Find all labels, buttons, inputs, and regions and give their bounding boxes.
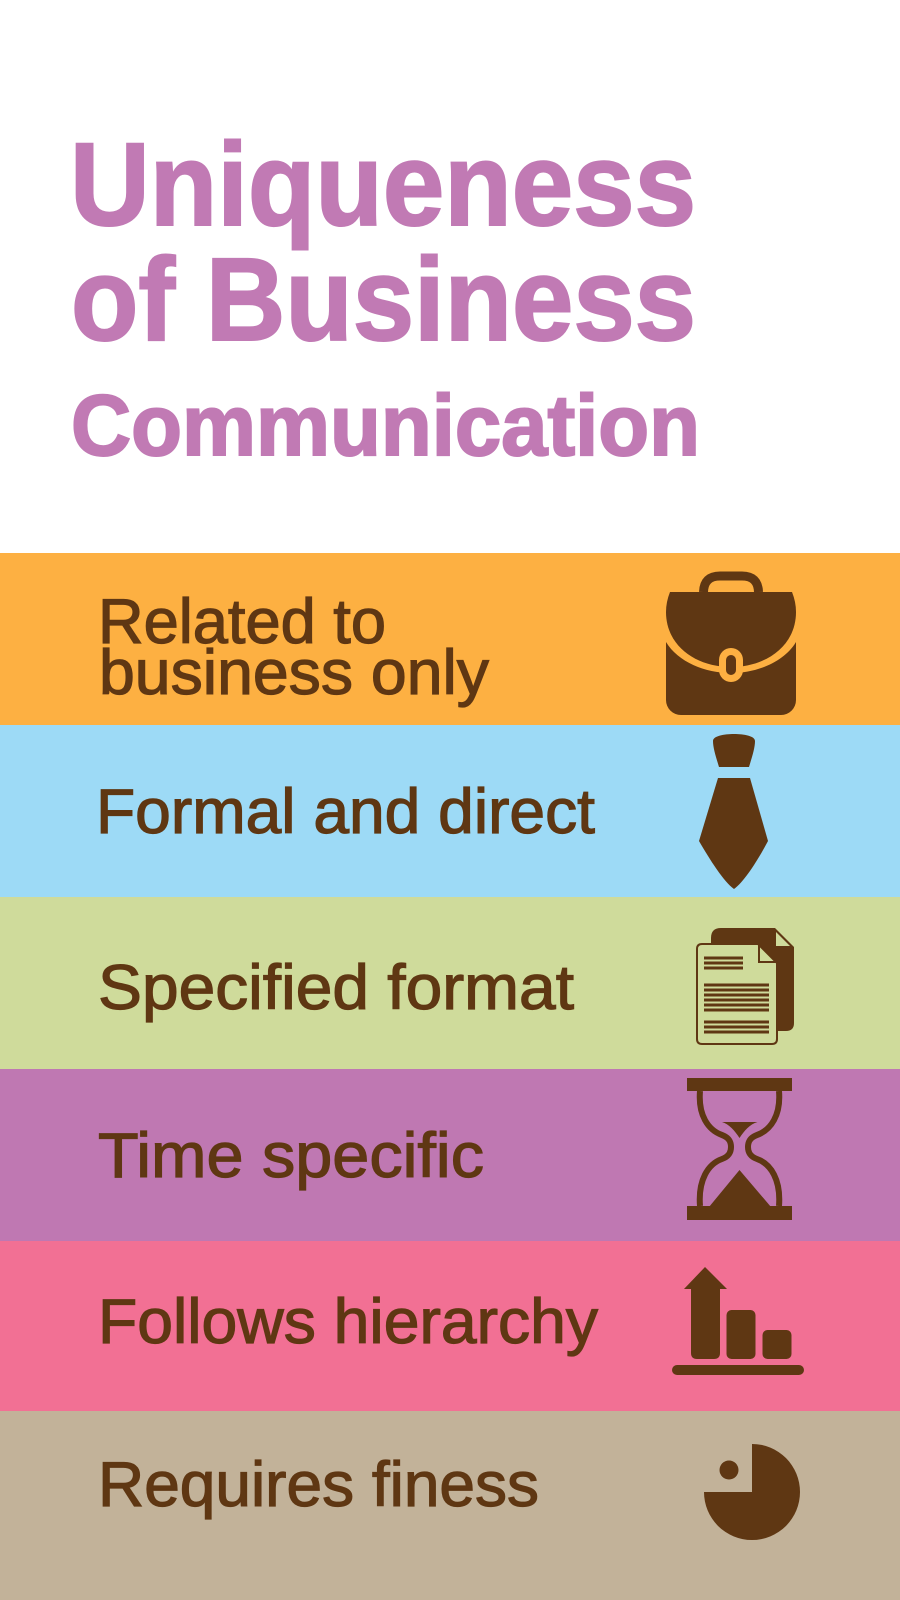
panel: follows hierarchy xyxy=(0,1241,900,1411)
text: related to business only: Related to xyxy=(98,587,386,657)
panel: requires finess xyxy=(0,1411,900,1600)
icon: pie chart xyxy=(704,1444,800,1540)
panel: specified format xyxy=(0,897,900,1069)
title: Communication xyxy=(71,378,700,474)
text: time specific: Time specific xyxy=(98,1121,484,1191)
text: requires finess: Requires finess xyxy=(98,1450,539,1520)
icon: briefcase xyxy=(666,576,796,715)
icon: hourglass xyxy=(687,1078,792,1220)
icon: necktie xyxy=(699,734,768,889)
text: related to business only xyxy=(98,587,489,708)
title: of Business xyxy=(71,234,696,366)
panel: formal and direct xyxy=(0,725,900,897)
title xyxy=(70,119,700,474)
text: formal and direct: Formal and direct xyxy=(96,777,595,847)
icon: hierarchy bars with arrow xyxy=(672,1267,804,1375)
title: Uniqueness xyxy=(70,119,696,251)
text: specified format: Specified format xyxy=(98,953,575,1023)
panel: related to business only xyxy=(0,553,900,725)
text: related to business only: business only xyxy=(99,638,489,708)
text: follows hierarchy: Follows hierarchy xyxy=(98,1287,598,1357)
panel: time specific xyxy=(0,1069,900,1241)
icon: documents xyxy=(697,928,794,1044)
